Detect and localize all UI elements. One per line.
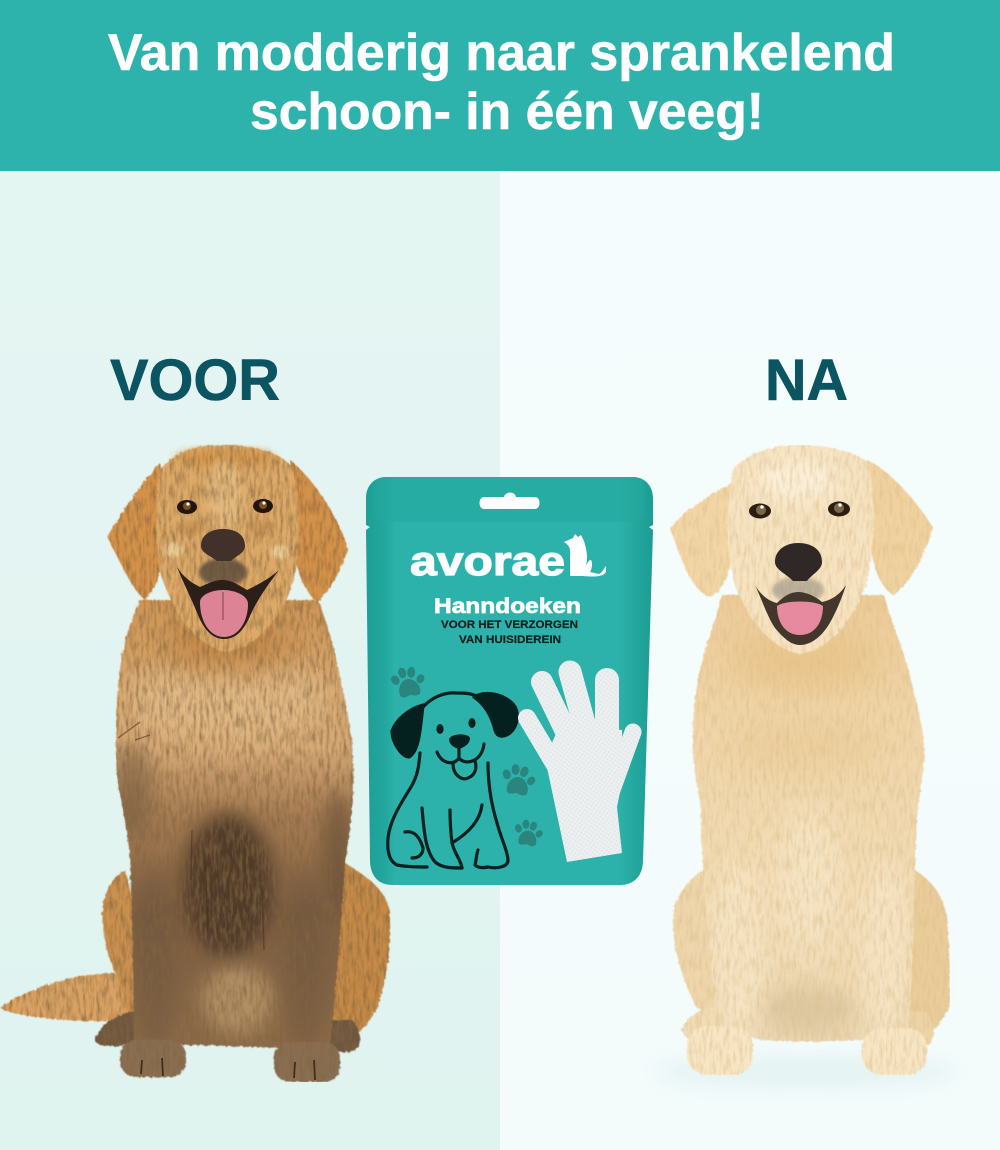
background: voor panel	[0, 171, 500, 1150]
brand name: avorae	[410, 538, 565, 584]
header banner	[0, 0, 1000, 171]
paws after	[687, 1026, 927, 1075]
dog before: muddy golden retriever	[0, 445, 390, 1082]
eyes before	[177, 499, 273, 514]
product pouch	[366, 477, 653, 885]
product subtitle: VAN HUISIDEREIN	[459, 634, 561, 646]
title	[108, 24, 895, 141]
title: schoon- in één veeg!	[250, 83, 764, 141]
nose after	[775, 543, 822, 581]
mouth after	[755, 585, 846, 645]
icon: paw prints	[388, 663, 546, 848]
icon: dog and cat logo	[564, 534, 606, 577]
mouth before	[177, 567, 279, 639]
hang hole	[480, 492, 540, 509]
head before	[107, 445, 348, 652]
product subtitle: VOOR HET VERZORGEN	[441, 619, 578, 631]
eyes after	[749, 502, 850, 518]
product subtitle	[441, 619, 578, 646]
mud paws before	[120, 1040, 340, 1082]
dog after: clean golden retriever	[655, 445, 955, 1088]
head after	[670, 445, 933, 654]
title: Van modderig naar sprankelend	[108, 24, 895, 82]
nose before	[201, 529, 245, 561]
background: na panel	[500, 171, 1000, 1150]
label: voor: VOOR	[110, 348, 280, 413]
product name: Hanndoeken	[434, 595, 581, 618]
label: na: NA	[765, 348, 848, 413]
icon: white grooming glove	[527, 672, 633, 862]
icon: cartoon puppy	[388, 693, 517, 868]
